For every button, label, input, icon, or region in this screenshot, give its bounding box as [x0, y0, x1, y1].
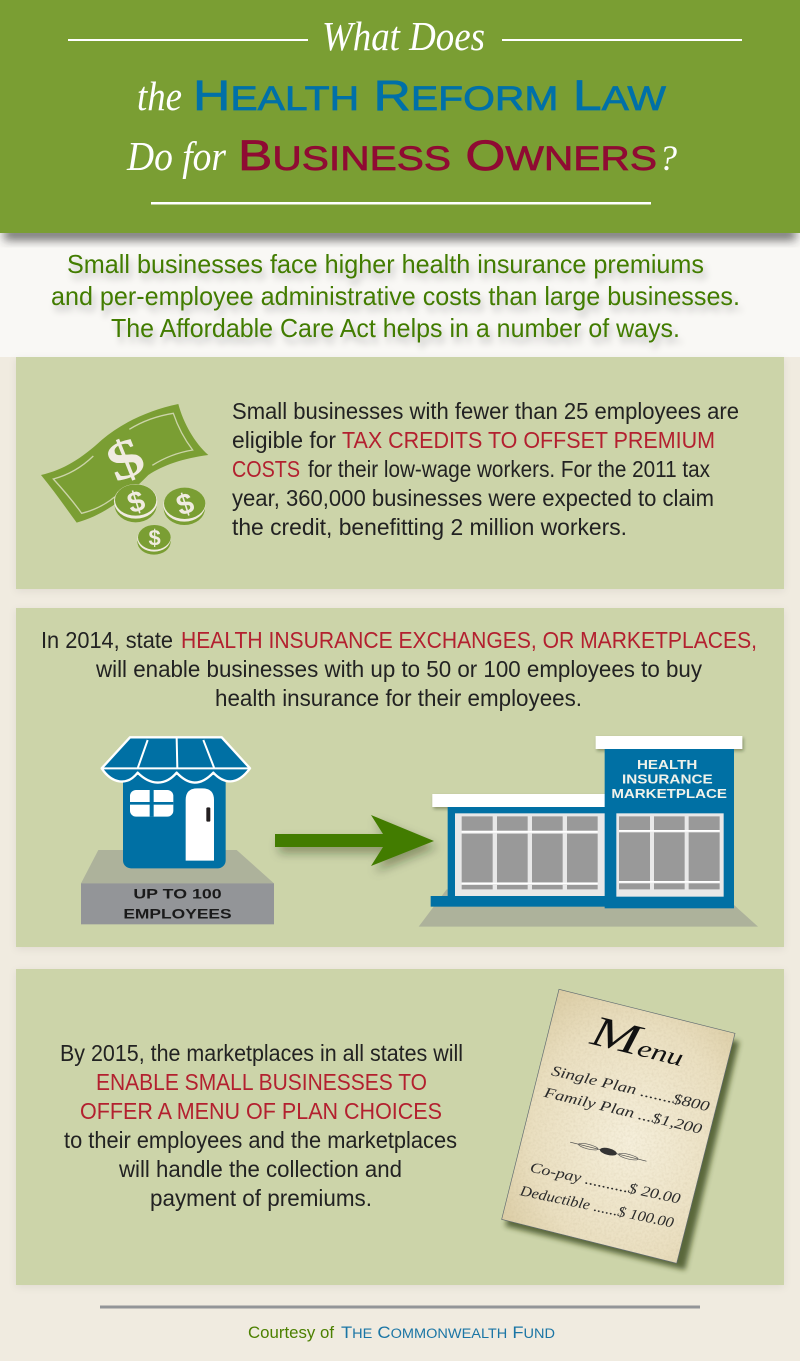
- lower roof: [432, 794, 605, 807]
- icon: coin three: [137, 525, 171, 555]
- shop awning: [102, 737, 250, 783]
- text block: plan choices: to their employees and the marketplaces: [64, 1127, 457, 1153]
- text block: tax credits: COSTS: [232, 456, 300, 482]
- left wing: [431, 807, 605, 907]
- menu text: Single Plan .......$800: [550, 1063, 712, 1115]
- text block: plan choices: ENABLE SMALL BUSINESSES TO: [96, 1069, 427, 1095]
- intro text: [51, 249, 740, 343]
- icon: small shop on pedestal: [81, 737, 274, 924]
- text block: tax credits: for their low-wage workers. For the 2011 tax: [308, 456, 710, 482]
- pedestal: [81, 850, 274, 924]
- title word: the: the: [137, 73, 182, 119]
- text block: plan choices: OFFER A MENU OF PLAN CHOICES: [80, 1098, 442, 1124]
- title: Health Reform Law: HEALTH R EFORM LAW: [193, 72, 666, 120]
- text block: marketplaces: health insurance for their employees.: [215, 685, 582, 711]
- text block: tax credits: year, 360,000 businesses were expected to claim: [232, 485, 714, 511]
- pedestal: UP TO 100: [133, 886, 222, 902]
- text block: marketplaces: HEALTH INSURANCE EXCHANGES, OR MARKETPLACES,: [181, 627, 757, 653]
- intro text: Small businesses face higher health insurance premiums: [67, 249, 704, 279]
- icon: coin two: [163, 486, 205, 525]
- menu text: Co-pay ..........$ 20.00: [529, 1160, 683, 1208]
- upper roof: [596, 736, 742, 749]
- footer credit: THE COMMONWEALTH FUND: [341, 1323, 555, 1342]
- tower: INSURANCE: [622, 773, 713, 787]
- text block: tax credits: the credit, benefitting 2 million workers.: [232, 514, 627, 540]
- title question mark: ?: [659, 138, 677, 178]
- tower: [605, 749, 734, 908]
- menu ornament: [569, 1139, 647, 1164]
- ground: [419, 889, 758, 927]
- menu text: Family Plan ...$1,200: [541, 1085, 704, 1138]
- icon: menu card: [502, 989, 739, 1270]
- text block: tax credits: eligible for: [232, 427, 336, 453]
- icon: health insurance marketplace building: [419, 736, 758, 927]
- icon: coin one: [114, 484, 157, 522]
- text block: marketplaces: [41, 627, 757, 711]
- text block: plan choices: By 2015, the marketplaces in all states will: [60, 1040, 463, 1066]
- title words: Do for: Do for: [126, 133, 227, 179]
- text block: plan choices: will handle the collection and: [118, 1156, 402, 1182]
- title banner: [0, 0, 800, 240]
- intro band: [0, 233, 800, 357]
- footer credit: [248, 1323, 555, 1342]
- footer rule: [100, 1306, 700, 1308]
- title line: What Does: What Does: [322, 13, 485, 59]
- menu text: Menu: [585, 1006, 690, 1076]
- text block: plan choices: [60, 1040, 463, 1211]
- text block: tax credits: Small businesses with fewer than 25 employees are: [232, 398, 739, 424]
- panel: tax credits: [16, 357, 784, 589]
- arrow: [275, 815, 434, 866]
- icon: money bill and coins: [41, 404, 208, 555]
- panel: menu of plans: [16, 969, 784, 1285]
- menu text: [517, 1006, 712, 1232]
- text block: marketplaces: will enable businesses with up to 50 or 100 employees to buy: [95, 656, 702, 682]
- text block: tax credits: [232, 398, 739, 540]
- icon: dollar bill: [41, 404, 208, 523]
- title: Business Owners: BUSINESS O WNERS: [238, 132, 657, 180]
- tower: HEALTH: [637, 758, 697, 772]
- text block: tax credits: TAX CREDITS TO OFFSET PREMIUM: [342, 427, 715, 453]
- intro text: and per-employee administrative costs than large businesses.: [51, 281, 740, 311]
- footer credit: Courtesy of: [248, 1323, 334, 1342]
- icon: coin two: $: [172, 486, 198, 523]
- tower: MARKETPLACE: [611, 787, 727, 801]
- icon: coin one: $: [123, 484, 149, 520]
- menu text: Deductible ......$ 100.00: [517, 1183, 676, 1232]
- text block: plan choices: payment of premiums.: [150, 1185, 372, 1211]
- text block: marketplaces: In 2014, state: [41, 627, 173, 653]
- panel: marketplaces: [16, 608, 784, 947]
- intro text: The Affordable Care Act helps in a number of ways.: [111, 313, 680, 343]
- shop building: [123, 775, 226, 868]
- pedestal: EMPLOYEES: [123, 905, 232, 921]
- icon: dollar bill: $: [98, 425, 153, 494]
- icon: coin three: $: [149, 526, 161, 551]
